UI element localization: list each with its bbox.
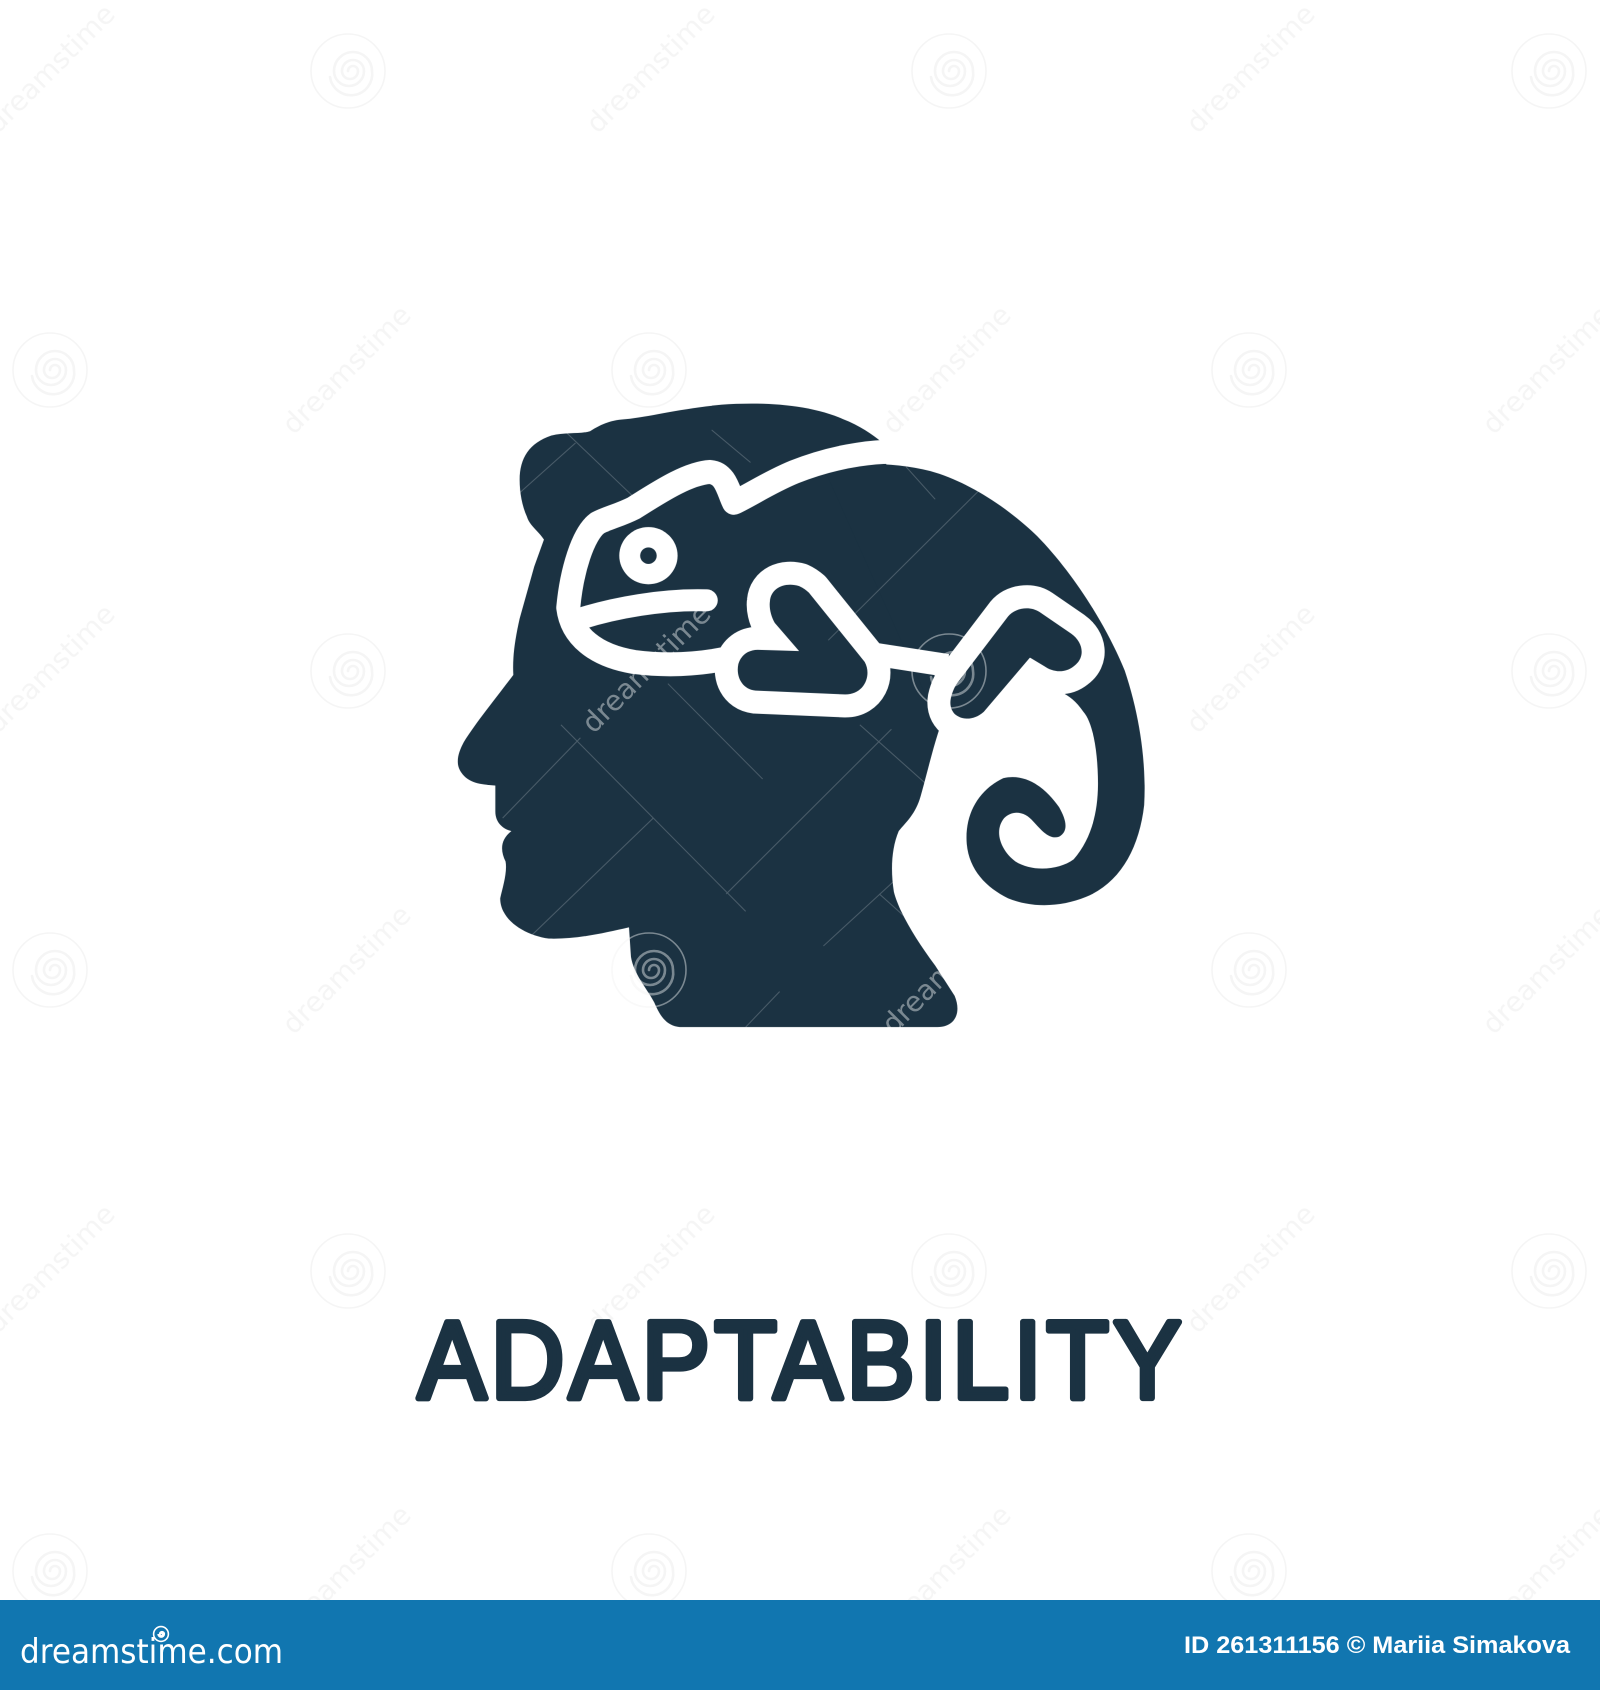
faint watermark pattern: dreamstime	[1179, 0, 1321, 139]
belly line	[874, 654, 947, 665]
watermark hairlines on icon	[503, 430, 979, 1027]
chameleon head and back outline	[568, 452, 908, 664]
icon: head with chameleon	[458, 404, 1145, 1027]
chameleon body and tail	[823, 464, 1145, 905]
faint watermark pattern: dreamstime	[579, 0, 721, 139]
faint watermark pattern: dreamstime	[275, 898, 417, 1040]
chameleon mouth line	[578, 600, 707, 619]
faint watermark pattern: dreamstime	[275, 298, 417, 440]
head silhouette	[458, 404, 957, 1027]
faint watermark pattern: dreamstime	[1179, 1197, 1321, 1339]
image id and credit: ID 261311156 © Mariia Simakova	[1184, 1632, 1571, 1659]
watermarks over icon	[575, 597, 1017, 1040]
faint watermark pattern: dreamstime	[275, 1498, 417, 1640]
faint watermark pattern: dreamstime	[579, 1197, 721, 1339]
chameleon back leg	[950, 608, 1082, 719]
faint watermark pattern: dreamstime	[875, 298, 1017, 440]
faint watermark pattern: dreamstime	[875, 1498, 1017, 1640]
title: ADAPTABILITY	[418, 1299, 1182, 1422]
chameleon front leg	[738, 585, 867, 694]
watermarks over icon: dreamstime	[575, 597, 717, 739]
faint watermark pattern: dreamstime	[1179, 597, 1321, 739]
chameleon eye	[619, 527, 678, 584]
footer logo: dreamstime.com	[20, 1632, 283, 1672]
watermarks over icon: dreamstime	[875, 898, 1017, 1040]
footer bar	[0, 1600, 1600, 1690]
